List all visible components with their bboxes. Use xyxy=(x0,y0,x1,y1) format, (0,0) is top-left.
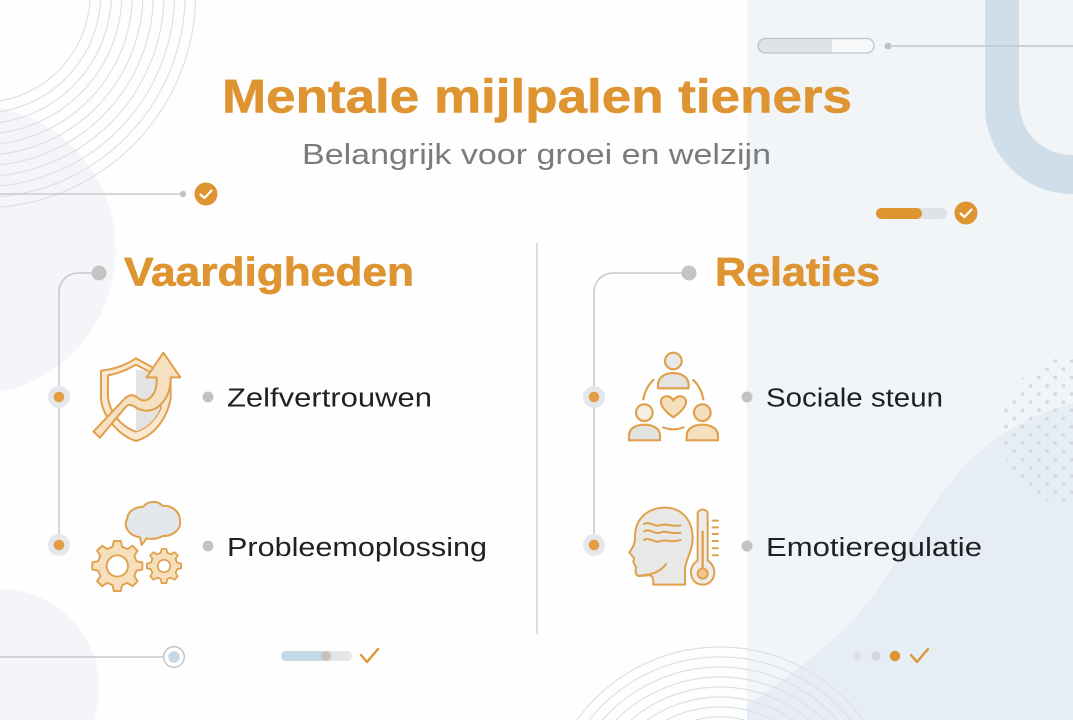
heading: Relaties: Relaties xyxy=(715,250,880,294)
large gear xyxy=(92,541,142,591)
timeline: Relaties xyxy=(583,266,696,556)
icon: shield with rising arrow xyxy=(93,353,180,441)
icon: head with thermometer xyxy=(629,508,718,585)
top left connector with check badge xyxy=(0,182,218,206)
icon: gears with thought bubble xyxy=(92,502,181,591)
subtitle: Belangrijk voor groei en welzijn xyxy=(302,139,771,171)
bottom left connector with node xyxy=(0,647,184,667)
panel: Vaardigheden xyxy=(48,250,487,591)
bullet: Emotieregulatie: Emotieregulatie xyxy=(766,534,982,562)
panel: Relaties xyxy=(583,250,982,585)
bottom progress bar with check xyxy=(281,649,378,662)
timeline: Vaardigheden xyxy=(48,266,106,556)
heading: Vaardigheden: Vaardigheden xyxy=(124,250,414,294)
decorative dot pattern xyxy=(1004,359,1073,502)
bullet: Probleemoplossing: Probleemoplossing xyxy=(227,534,487,562)
decorative U shape xyxy=(985,0,1073,194)
column divider xyxy=(536,243,538,634)
decorative concentric arcs bottom xyxy=(577,647,863,720)
bullet: Zelfvertrouwen: Zelfvertrouwen xyxy=(227,384,432,412)
decorative concentric arcs top left xyxy=(0,0,196,207)
title: Mentale mijlpalen tieners xyxy=(222,70,852,122)
top right progress bar with connector xyxy=(758,38,1073,53)
bullet: Sociale steun: Sociale steun xyxy=(766,384,943,412)
thought bubble xyxy=(126,502,180,545)
icon: people around a heart xyxy=(629,353,718,440)
small gear xyxy=(147,549,181,583)
bottom right step dots with check xyxy=(852,649,928,662)
orange progress bar with check badge xyxy=(876,202,978,224)
